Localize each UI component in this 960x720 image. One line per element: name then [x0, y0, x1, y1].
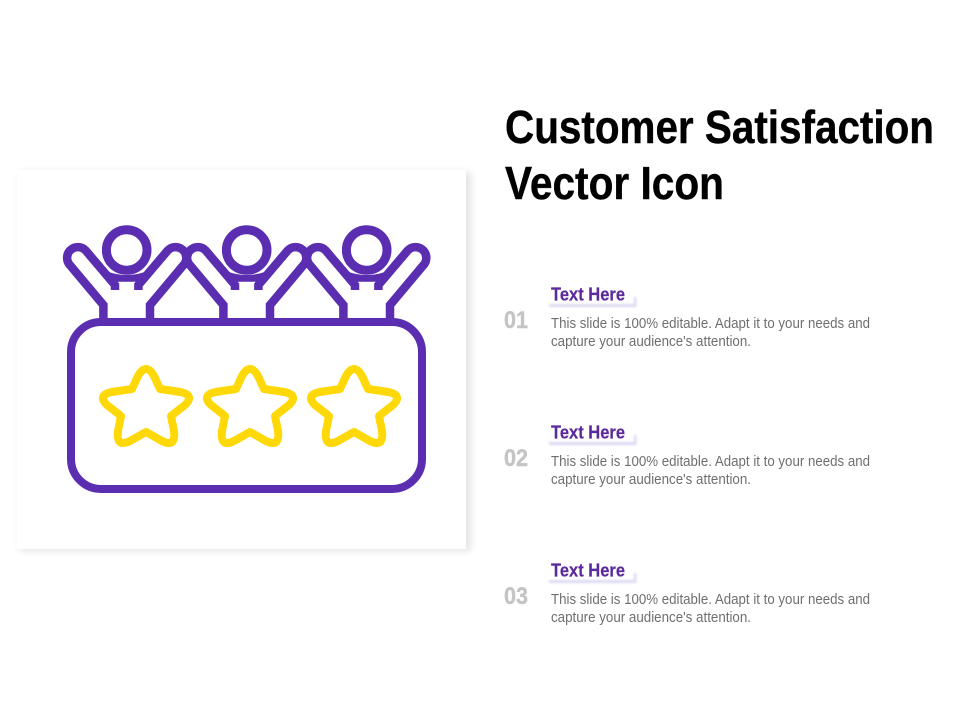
body text 01: This slide is 100% editable. Adapt it to your needs and [551, 316, 870, 332]
body text 02: capture your audience's attention. [551, 472, 751, 488]
person 3 [307, 230, 426, 320]
body text 02 [551, 454, 870, 488]
icon: three raised-arm people [67, 230, 426, 320]
person 1 [67, 230, 186, 320]
star 1 [103, 369, 189, 443]
number 02: 02 [504, 445, 528, 472]
body text 01: capture your audience's attention. [551, 334, 751, 350]
title: Vector Icon [505, 157, 724, 209]
title [505, 101, 934, 209]
number 01: 01 [504, 307, 528, 334]
icon: three rating stars [103, 369, 397, 443]
body text 03: This slide is 100% editable. Adapt it to your needs and [551, 592, 870, 608]
heading underline [549, 297, 636, 307]
body text 03 [551, 592, 870, 626]
heading underline [549, 573, 636, 583]
list item 02 [504, 422, 870, 488]
list item 03 [504, 560, 870, 626]
icon: customer satisfaction [67, 230, 426, 489]
panel: icon card [17, 170, 471, 551]
heading 02: Text Here [551, 422, 625, 442]
heading 01: Text Here [551, 284, 625, 304]
person 2 [187, 230, 306, 320]
heading underline [549, 435, 636, 445]
body text 03: capture your audience's attention. [551, 610, 751, 626]
star 3 [311, 369, 397, 443]
body text 01 [551, 316, 870, 350]
icon: rating board [71, 322, 422, 489]
number 03: 03 [504, 583, 528, 610]
star 2 [207, 369, 293, 443]
heading 03: Text Here [551, 560, 625, 580]
body text 02: This slide is 100% editable. Adapt it to your needs and [551, 454, 870, 470]
list item 01 [504, 284, 870, 350]
